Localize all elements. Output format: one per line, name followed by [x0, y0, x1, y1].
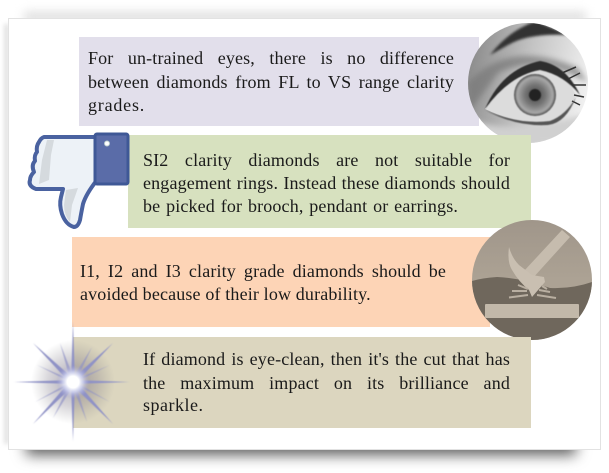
panel: eye-clean cut tip	[73, 337, 531, 428]
icon: sparkle star	[16, 324, 127, 440]
text: cut impact: sparkle.	[143, 395, 203, 415]
panel: SI2 tip	[128, 135, 531, 228]
icon: thumbs down	[28, 132, 130, 229]
text: low durability: I1, I2 and I3 clarity grade diamonds should be	[80, 261, 446, 281]
text: FL to VS: between diamonds from FL to VS range clarity	[88, 72, 454, 92]
text: SI2: SI2 clarity diamonds are not suitable for	[143, 150, 510, 170]
text: low durability: avoided because of their low durability.	[80, 284, 371, 304]
text: FL to VS: For un-trained eyes, there is no difference	[88, 48, 454, 68]
text: cut impact: the maximum impact on its brilliance and	[143, 373, 510, 393]
text: SI2: engagement rings. Instead these diamonds should	[143, 173, 510, 193]
panel: I1 I2 I3 tip	[72, 237, 490, 327]
panel: eye-clean tip	[79, 37, 479, 126]
text: SI2: be picked for brooch, pendant or earrings.	[143, 196, 458, 216]
text: cut impact	[143, 349, 510, 415]
text: low durability	[80, 261, 446, 304]
text: cut impact: If diamond is eye-clean, then it's the cut that has	[143, 349, 510, 369]
text: FL to VS	[88, 48, 454, 115]
icon: eye	[468, 23, 588, 143]
text: SI2	[143, 150, 510, 216]
text: FL to VS: grades.	[88, 95, 145, 115]
icon: hammer	[472, 220, 592, 340]
